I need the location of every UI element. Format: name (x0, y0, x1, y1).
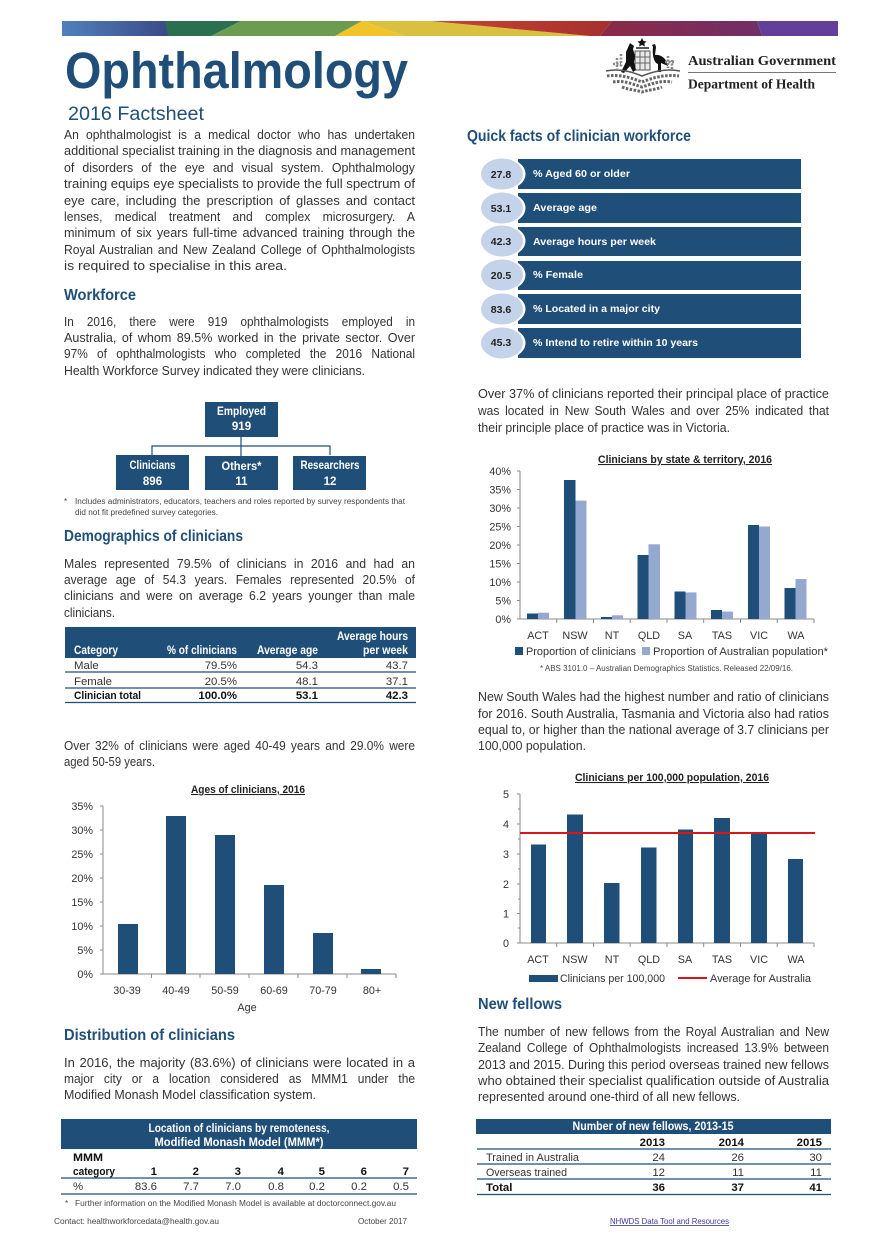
logo: Australian Government Department of Health (606, 38, 836, 92)
title: Ophthalmology (65, 42, 409, 99)
bar chart: clinicians per 100,000 population: TAS (712, 954, 732, 966)
chart legend (515, 646, 829, 658)
text block: workforce: In 2016, there were 919 ophthalmologists employed in (64, 315, 415, 329)
bar chart: clinicians by state and territory: 40% (489, 466, 511, 478)
table: demographics by category: Male (74, 660, 99, 672)
chart legend: Proportion of clinicians (526, 646, 637, 658)
table: location by remoteness: 2 (193, 1166, 199, 1178)
table: demographics by category: 48.1 (296, 676, 318, 688)
text block: workforce: Australia, of whom 89.5% worked in the private sector. Over (64, 331, 415, 345)
table: demographics by category: Clinician total (74, 690, 141, 702)
bar chart: clinicians per 100,000 population: NT (605, 954, 620, 966)
bar chart: clinicians per 100,000 population: 2 (503, 879, 509, 891)
chart title: Clinicians per 100,000 population, 2016 (575, 772, 769, 784)
table: number of new fellows: Number of new fellows, 2013-15 (572, 1121, 734, 1133)
bar chart: clinicians by state and territory: 10% (489, 577, 511, 589)
footnote: MMM: Further information on the Modified Monash Model is available at doctorconnect.gov.au (75, 1199, 396, 1208)
bar chart: ages of clinicians: 20% (71, 873, 93, 885)
bar chart: clinicians by state and territory: 35% (489, 484, 511, 496)
table: number of new fellows: 24 (652, 1152, 665, 1164)
footer: data tool link: NHWDS Data Tool and Resources (610, 1217, 729, 1226)
box: researchers (293, 456, 366, 490)
text block: new fellows: Zealand College of Ophthalmologists increased 13.9% between (478, 1041, 829, 1055)
table: location by remoteness: 3 (235, 1166, 241, 1178)
bar chart: ages of clinicians: 40-49 (162, 985, 190, 997)
text block: introduction: Royal Australian and New Zealand College of Ophthalmologists (64, 243, 415, 257)
fact: female (478, 258, 801, 292)
table: number of new fellows: 11 (732, 1167, 744, 1179)
subtitle: 2016 Factsheet (68, 103, 205, 125)
table: demographics by category: Category (74, 645, 119, 657)
text block: distribution: major city or a location considered as MMM1 under the (64, 1072, 415, 1086)
table: demographics by category: Average age (257, 645, 318, 657)
text block: demographics: Males represented 79.5% of clinicians in 2016 and had an (64, 557, 415, 571)
footnote: others: Includes administrators, educators, teachers and roles reported by survey respondents that (75, 497, 406, 506)
bar chart: clinicians by state and territory: WA (788, 630, 805, 642)
text block: introduction: eye care, including the prescription of glasses and contact (64, 194, 416, 208)
box: clinicians: 896 (143, 476, 162, 488)
table: location by remoteness: category (73, 1166, 116, 1178)
bar chart: clinicians by state and territory: ACT (527, 630, 549, 642)
table: location by remoteness: 0.2 (309, 1181, 325, 1193)
table: location by remoteness: 6 (361, 1166, 367, 1178)
text block: demographics: clinicians. (64, 606, 115, 620)
table: number of new fellows: Total (486, 1182, 512, 1194)
table: location by remoteness: 83.6 (135, 1181, 157, 1193)
table: number of new fellows: 2015 (797, 1137, 823, 1149)
fact: average hours: Average hours per week (533, 237, 657, 248)
bar chart: clinicians per 100,000 population: QLD (638, 954, 660, 966)
bar chart: clinicians per 100,000 population: 4 (503, 819, 509, 831)
text block: new fellows: 2013 and 2015. During this period overseas trained new fellows (478, 1058, 829, 1072)
table: demographics by category (65, 627, 416, 702)
bar chart: clinicians by state and territory: 15% (489, 558, 511, 570)
table: number of new fellows: 12 (652, 1167, 665, 1179)
heading: Workforce: Workforce (64, 287, 136, 304)
bar chart: clinicians per 100,000 population (503, 772, 815, 985)
bar chart: clinicians by state and territory: SA (678, 630, 693, 642)
bar chart: ages of clinicians: 0% (77, 969, 93, 981)
logo: Australian Government Department of Health: Department of Health (688, 76, 815, 92)
chart title: Clinicians by state & territory, 2016 (598, 454, 772, 466)
table: demographics by category: 100.0% (198, 690, 237, 702)
table: location by remoteness: Location of clinicians by remoteness, (148, 1123, 330, 1135)
text block: introduction: additional specialist training in the diagnosis and management (64, 144, 415, 158)
bar chart: ages of clinicians: 50-59 (211, 985, 239, 997)
bar chart: clinicians by state and territory: QLD (638, 630, 660, 642)
table: number of new fellows: 41 (809, 1182, 823, 1194)
table: demographics by category: 20.5% (205, 676, 237, 688)
table: location by remoteness: 0.5 (393, 1181, 409, 1193)
table: location by remoteness (61, 1119, 417, 1194)
footnote: others: * (64, 497, 67, 506)
table: demographics by category: 42.3 (386, 690, 408, 702)
table: number of new fellows: 2014 (719, 1137, 745, 1149)
text block: ratios: 100,000 population. (478, 739, 586, 753)
fact: retire within 10 years: 45.3 (491, 337, 511, 349)
fact: aged 60 or older: 27.8 (491, 169, 511, 181)
bar chart: ages of clinicians: 60-69 (260, 985, 288, 997)
bar chart: clinicians by state and territory: NSW (562, 630, 588, 642)
text block: place of practice: Over 37% of clinicians reported their principal place of practice (478, 387, 829, 401)
text block: ratios: New South Wales had the highest number and ratio of clinicians (478, 690, 829, 704)
text block: workforce: Health Workforce Survey indicated they were clinicians. (64, 364, 365, 378)
fact: female: 20.5 (491, 270, 511, 282)
bar chart: ages of clinicians: 70-79 (309, 985, 337, 997)
text block: distribution (64, 1056, 415, 1102)
box: others: Others* (222, 461, 262, 473)
bar chart: clinicians by state and territory: 0% (495, 614, 511, 626)
box: employed (205, 402, 278, 437)
text block: new fellows (477, 1025, 830, 1104)
bar chart: clinicians per 100,000 population: WA (788, 954, 805, 966)
logo: Australian Government Department of Health: Australian Government (688, 54, 836, 69)
panel: quick facts list (478, 158, 801, 360)
footnote: others (64, 497, 406, 517)
table: demographics by category: % of clinicians (167, 645, 237, 657)
text block: demographics (64, 557, 415, 620)
fact: female: % Female (533, 270, 584, 281)
table: number of new fellows: Overseas trained (486, 1167, 567, 1179)
bar chart: ages of clinicians (71, 784, 396, 1014)
table: demographics by category: per week (363, 645, 409, 657)
bar chart: ages of clinicians: 5% (77, 945, 93, 957)
bar chart: clinicians by state and territory: VIC (750, 630, 768, 642)
footer: date: October 2017 (358, 1217, 408, 1226)
fact: average age (478, 192, 801, 224)
table: location by remoteness: 7.7 (183, 1181, 199, 1193)
bar chart: clinicians per 100,000 population: ACT (527, 954, 549, 966)
box: clinicians: Clinicians (130, 460, 176, 472)
table: demographics by category: 43.7 (386, 660, 408, 672)
chart legend (529, 973, 811, 985)
text block: place of practice: was located in New South Wales and over 25% indicated that (477, 404, 829, 418)
table: location by remoteness: 0.8 (268, 1181, 284, 1193)
text block: new fellows: who obtained their specialist qualification outside of Australia (477, 1074, 829, 1088)
table: number of new fellows: 11 (810, 1167, 822, 1179)
bar chart: ages of clinicians: 30-39 (113, 985, 141, 997)
heading: Demographics of clinicians: Demographics of clinicians (64, 528, 243, 545)
table: location by remoteness: 4 (278, 1166, 285, 1178)
text block: introduction: of disorders of the eye and visual system. Ophthalmology (64, 161, 416, 175)
fact: retire within 10 years: % Intend to retire within 10 years (533, 338, 699, 349)
bar chart: clinicians per 100,000 population: 1 (503, 908, 509, 920)
text block: introduction: minimum of six years full-time advanced training through the (64, 226, 415, 240)
text block: ratios: equal to, or higher than the national average of 3.7 clinicians per (478, 723, 829, 737)
org chart: employed breakdown (116, 402, 366, 490)
bar chart: clinicians by state and territory: 5% (495, 596, 511, 608)
box: researchers: Researchers (300, 460, 360, 472)
bar chart: ages of clinicians: 15% (71, 897, 93, 909)
icon: coat of arms (606, 38, 680, 92)
text block: introduction: An ophthalmologist is a medical doctor who has undertaken (64, 128, 415, 142)
header colour banner (62, 21, 838, 36)
table: number of new fellows (476, 1119, 831, 1194)
chart legend: Average for Australia (710, 973, 811, 985)
text block: introduction: training equips eye specialists to provide the full spectrum of (64, 177, 416, 191)
table: number of new fellows: 2013 (640, 1137, 665, 1149)
bar chart: ages of clinicians: 80+ (363, 985, 381, 997)
fact: average age: Average age (533, 203, 598, 214)
text block: workforce (64, 315, 415, 378)
text block: introduction (64, 128, 416, 273)
text block: new fellows: represented around one-third of all new fellows. (478, 1090, 740, 1104)
text block: place of practice: their principle place of practice was in Victoria. (478, 421, 730, 435)
bar chart: clinicians per 100,000 population: SA (678, 954, 693, 966)
table: location by remoteness: 1 (151, 1166, 158, 1178)
table: number of new fellows: 37 (731, 1182, 744, 1194)
fact: aged 60 or older (478, 158, 801, 190)
bar chart: clinicians per 100,000 population: 5 (503, 789, 509, 801)
text block: ratios: for 2016. South Australia, Tasmania and Victoria also had ratios (478, 707, 829, 721)
table: number of new fellows: 26 (731, 1152, 744, 1164)
bar chart: ages of clinicians: 35% (71, 801, 93, 813)
table: demographics by category: 54.3 (296, 660, 318, 672)
heading: Distribution of clinicians: Distribution of clinicians (64, 1027, 235, 1044)
bar chart: clinicians per 100,000 population: VIC (750, 954, 768, 966)
footnote: MMM: * (65, 1199, 68, 1208)
table: demographics by category: 53.1 (296, 690, 319, 702)
fact: major city: 83.6 (491, 304, 511, 316)
fact: average hours: 42.3 (491, 236, 511, 248)
text block: new fellows: The number of new fellows from the Royal Australian and New (478, 1025, 830, 1039)
text block: age summary: aged 50-59 years. (64, 755, 155, 769)
table: location by remoteness: 0.2 (351, 1181, 367, 1193)
bar chart: clinicians by state and territory: 20% (489, 540, 511, 552)
box: others: 11 (235, 476, 248, 488)
text block: place of practice (477, 387, 829, 435)
bar chart: clinicians by state and territory: TAS (712, 630, 732, 642)
text block: demographics: clinicians and were on average 6.2 years younger than male (64, 589, 415, 603)
footer: contact: Contact: healthworkforcedata@health.gov.au (54, 1217, 219, 1226)
fact: average age: 53.1 (491, 203, 511, 215)
table: demographics by category: Female (74, 676, 112, 688)
box: researchers: 12 (324, 476, 336, 488)
heading: Quick facts: Quick facts of clinician workforce (467, 128, 691, 145)
bar chart: ages of clinicians: 30% (71, 825, 93, 837)
bar chart: clinicians by state and territory: 25% (489, 522, 511, 534)
fact: major city (478, 292, 801, 326)
chart legend: Clinicians per 100,000 (560, 973, 665, 985)
table: location by remoteness: % (73, 1181, 83, 1193)
box: others (205, 456, 278, 490)
text block: distribution: In 2016, the majority (83.6%) of clinicians were located in a (64, 1056, 415, 1070)
fact: average hours (478, 224, 801, 258)
bar chart: clinicians per 100,000 population: 3 (503, 849, 509, 861)
text block: introduction: is required to specialise in this area. (64, 259, 287, 273)
bar chart: clinicians by state and territory: 30% (489, 503, 511, 515)
heading: New fellows: New fellows (478, 996, 562, 1013)
table: number of new fellows: 30 (809, 1152, 822, 1164)
table: location by remoteness: MMM (73, 1152, 103, 1164)
footnote: others: did not fit predefined survey categories. (75, 508, 218, 517)
fact: aged 60 or older: % Aged 60 or older (533, 169, 630, 180)
bar chart: ages of clinicians: 10% (71, 921, 93, 933)
bar chart: clinicians per 100,000 population: 0 (503, 938, 509, 950)
table: demographics by category: Average hours (337, 631, 408, 643)
table: location by remoteness: 5 (319, 1166, 326, 1178)
table: location by remoteness: Modified Monash Model (MMM*) (154, 1137, 324, 1149)
chart title: Ages of clinicians, 2016 (191, 784, 305, 796)
text block: age summary (64, 739, 415, 769)
table: number of new fellows: Trained in Australia (486, 1152, 580, 1164)
text block: demographics: average age of 54.3 years. Females represented 20.5% of (64, 573, 415, 587)
bar chart: ages of clinicians: Age (237, 1002, 257, 1014)
table: number of new fellows: 36 (652, 1182, 665, 1194)
bar chart: clinicians by state and territory: NT (605, 630, 620, 642)
table: demographics by category: 37.1 (386, 676, 408, 688)
chart footnote: * ABS 3101.0 – Australian Demographics Statistics. Released 22/09/16. (540, 664, 793, 673)
bar chart: ages of clinicians: 25% (71, 849, 93, 861)
box: employed: Employed (217, 406, 266, 418)
fact: retire within 10 years (478, 326, 801, 360)
bar chart: clinicians by state and territory (489, 454, 829, 673)
box: employed: 919 (232, 421, 251, 433)
box: clinicians (116, 455, 189, 490)
text block: distribution: Modified Monash Model classification system. (64, 1088, 316, 1102)
text block: introduction: lenses, medical treatment and complex microsurgery. A (64, 210, 416, 224)
table: location by remoteness: 7 (403, 1166, 409, 1178)
text block: workforce: 97% of ophthalmologists who completed the 2016 National (64, 347, 415, 361)
bar chart: clinicians per 100,000 population: NSW (562, 954, 588, 966)
chart legend: Proportion of Australian population* (653, 646, 829, 658)
text block: ratios (478, 690, 829, 753)
text block: age summary: Over 32% of clinicians were aged 40-49 years and 29.0% were (64, 739, 415, 753)
table: location by remoteness: 7.0 (225, 1181, 241, 1193)
fact: major city: % Located in a major city (533, 304, 661, 315)
table: demographics by category: 79.5% (205, 660, 237, 672)
